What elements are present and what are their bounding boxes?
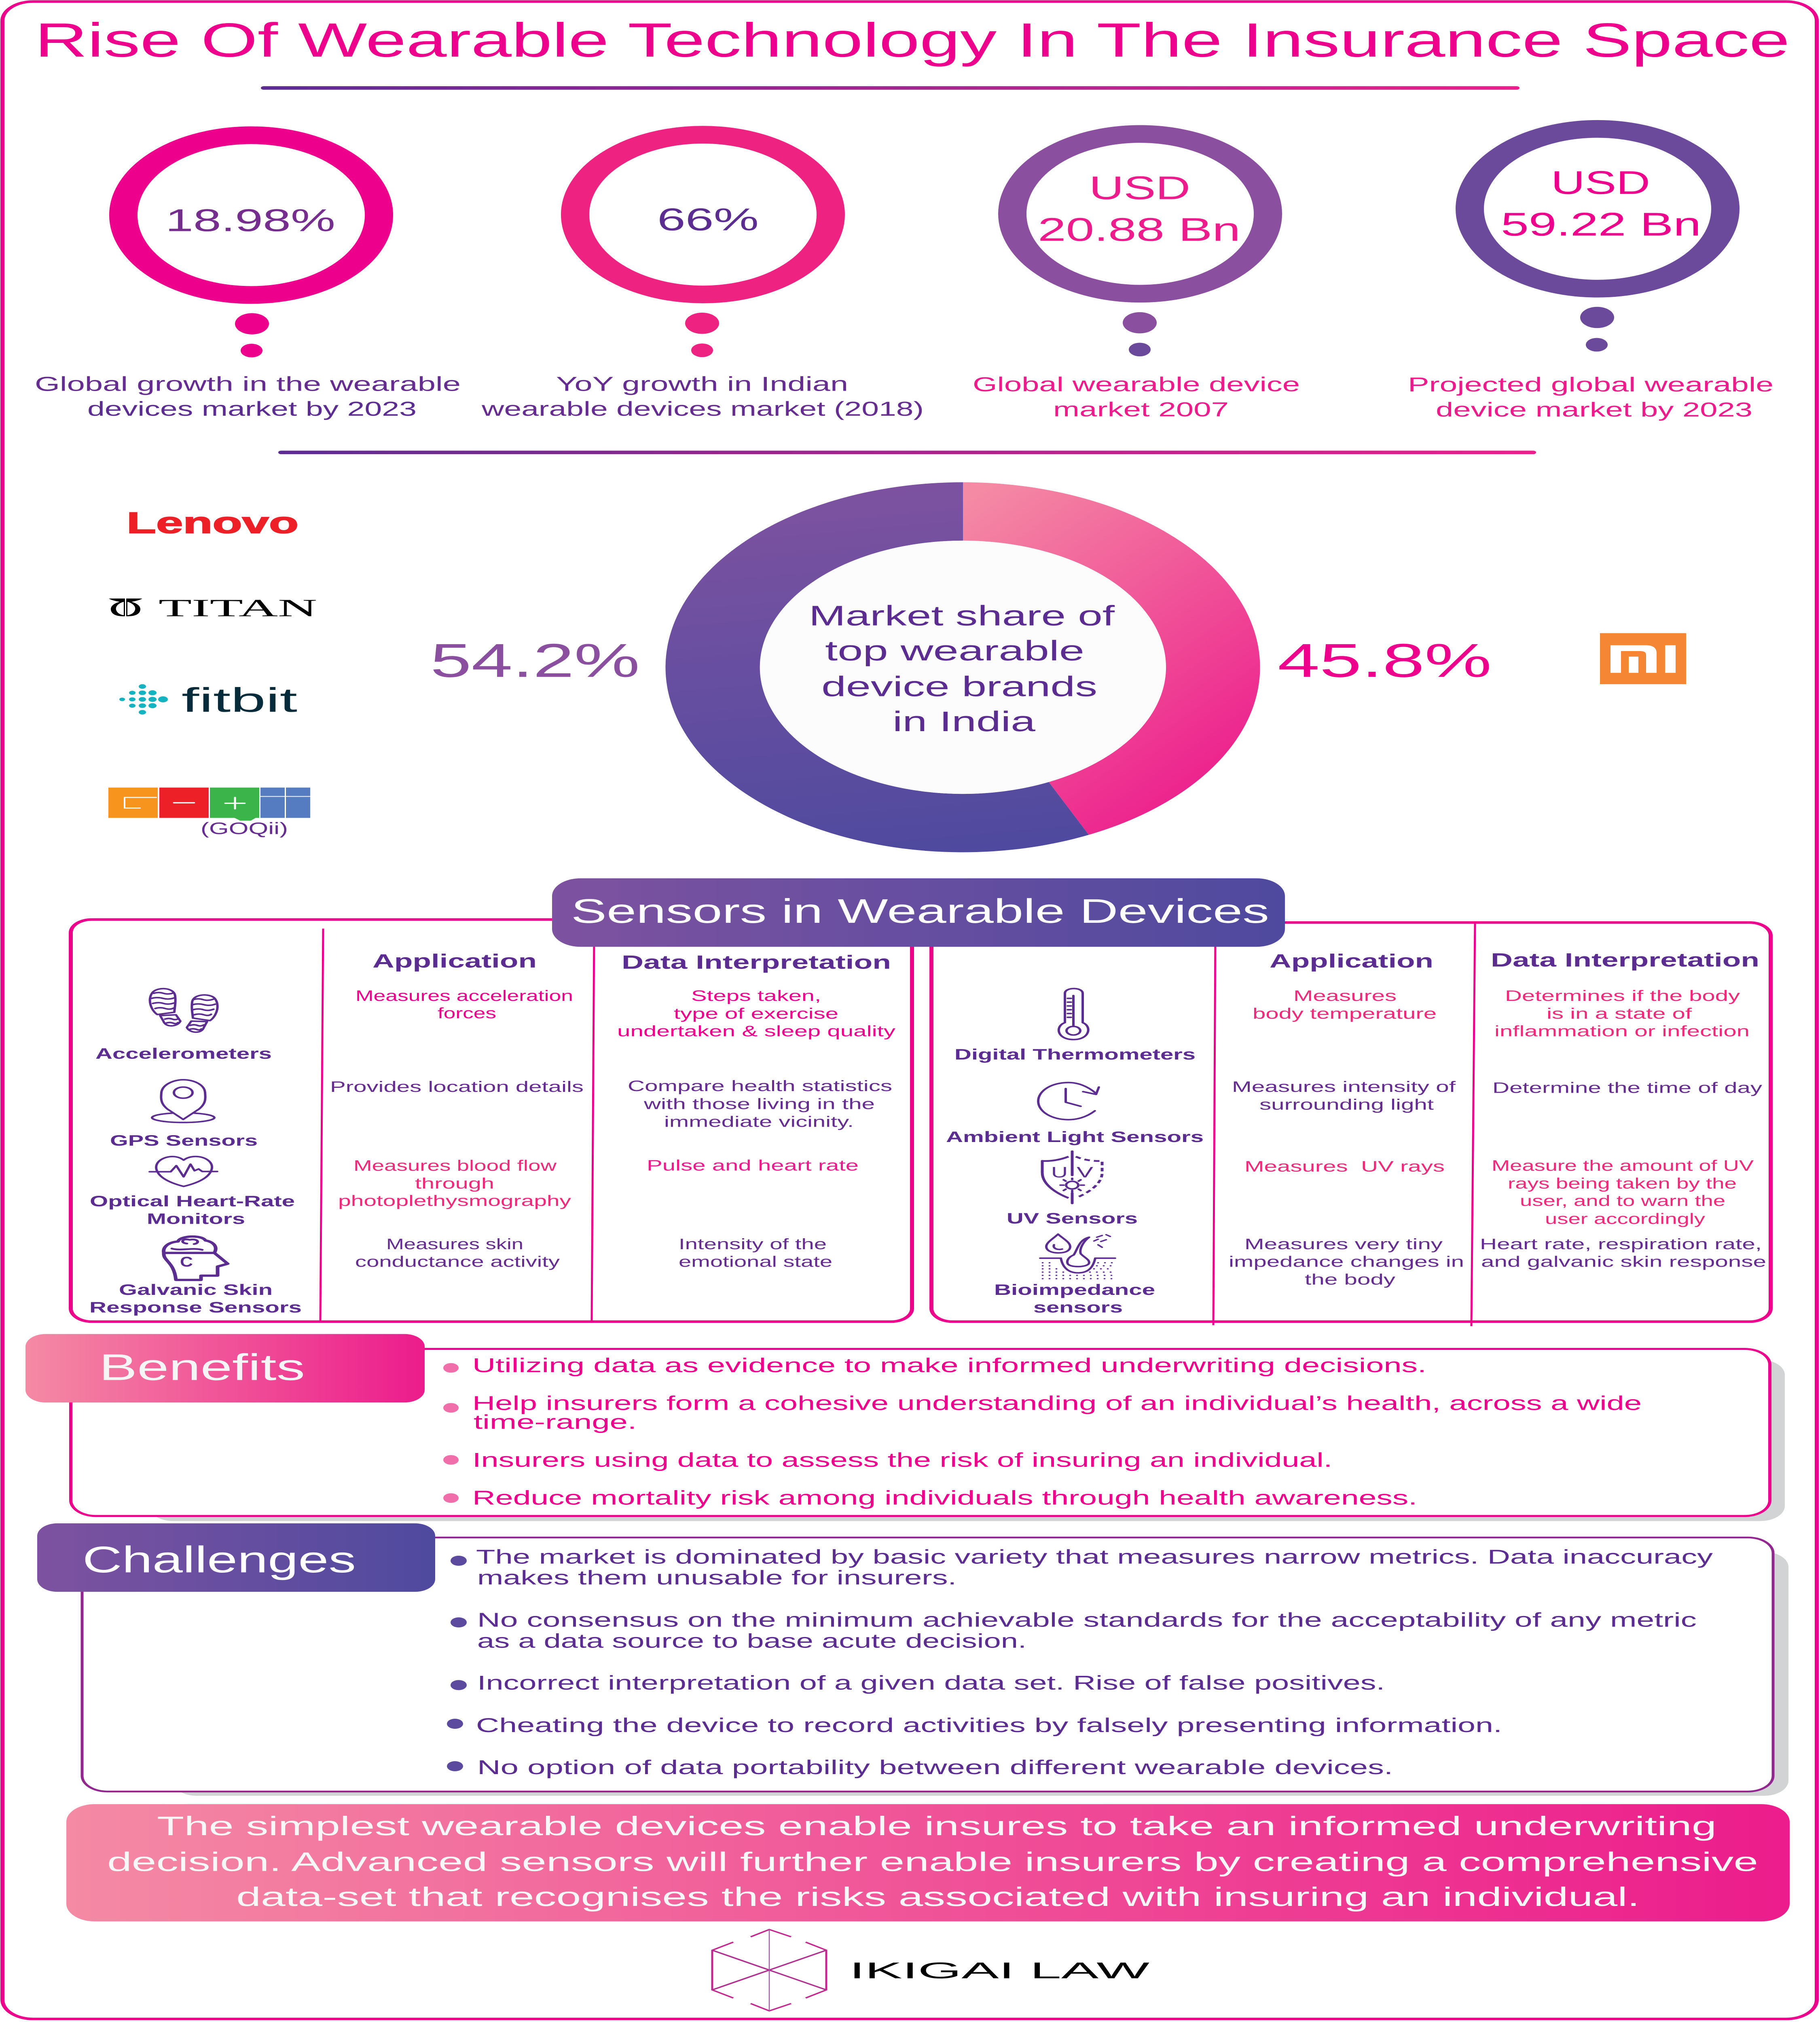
row 3 data interpretation: [1492, 1157, 1754, 1227]
row 2 data interpretation: Determine the time of day: [1492, 1079, 1762, 1096]
challenge 2: No consensus on the minimum achievable standards for the acceptability of any metric: [477, 1609, 1697, 1631]
label: galvanic skin response sensors: Galvanic Skin: [119, 1281, 273, 1298]
stat: Indian YoY growth 66%: [481, 135, 924, 420]
row 3 data interpretation: user, and to warn the: [1520, 1192, 1725, 1209]
benefit 4: Reduce mortality risk among individuals through health awareness.: [472, 1487, 1417, 1509]
row 2 data interpretation: Compare health statistics: [628, 1077, 892, 1094]
stat: Indian YoY growth 66%: wearable devices market (2018): [481, 398, 924, 420]
challenge 4: Cheating the device to record activities by falsely presenting information.: [476, 1714, 1502, 1736]
heading: application: Application: [1270, 950, 1433, 972]
row 4 application: conductance activity: [355, 1253, 560, 1270]
stat: USD 59.22 Bn: [1408, 129, 1773, 421]
label: bioimpedance sensors: [994, 1281, 1155, 1316]
donut centre label: device brands: [821, 670, 1097, 702]
label: bioimpedance sensors: Bioimpedance: [994, 1281, 1155, 1298]
icon: bioimpedance: [1040, 1234, 1115, 1279]
logo: Fitbit: fitbit: [182, 681, 297, 719]
stat: global growth 18.98%: [35, 135, 461, 420]
stat: USD 20.88 Bn: Global wearable device: [973, 373, 1300, 396]
benefit 2: time-range.: [474, 1411, 637, 1433]
row 4 application: Measures skin: [386, 1235, 523, 1252]
donut centre label: [809, 600, 1115, 737]
row 1 data interpretation: type of exercise: [674, 1005, 838, 1022]
row 4 data interpretation: [1480, 1235, 1766, 1270]
stat: USD 20.88 Bn: USD: [1089, 169, 1190, 206]
segment: 54.2% purple: [665, 482, 1089, 852]
logo: Lenovo: Lenovo: [127, 506, 298, 539]
benefit 3: Insurers using data to assess the risk of insuring an individual.: [472, 1449, 1332, 1471]
row 4 data interpretation: emotional state: [679, 1253, 832, 1270]
heading: sensors in wearable devices: Sensors in Wearable Devices: [571, 892, 1269, 930]
logo: GOQii: [108, 788, 310, 838]
icon: clock with arrow: [1038, 1083, 1099, 1120]
row 1 application: Measures acceleration: [356, 987, 573, 1004]
benefit 1: Utilizing data as evidence to make informed underwriting decisions.: [472, 1354, 1426, 1377]
icon: thermometer: [1059, 989, 1088, 1040]
logo: Ikigai Law: [712, 1929, 1149, 2011]
logo: GOQii: (GOQii): [201, 819, 288, 838]
icon: GPS pin: [152, 1080, 214, 1123]
row 4 application: [355, 1235, 560, 1270]
panel: sensors left table: [71, 920, 912, 1322]
row 3 application: Measures blood flow: [353, 1157, 557, 1174]
logo: Titan: TITAN: [159, 594, 317, 622]
heading: data interpretation: Data Interpretation: [622, 952, 891, 973]
callout: conclusion: decision. Advanced sensors will further enable insurers by creating a comprehensive: [107, 1847, 1758, 1877]
row 1 data interpretation: Steps taken,: [691, 987, 821, 1004]
row 1 data interpretation: undertaken & sleep quality: [617, 1023, 895, 1040]
row 4 data interpretation: [679, 1235, 832, 1270]
label: digital thermometers: Digital Thermometers: [954, 1046, 1196, 1063]
stat: Indian YoY growth 66%: 66%: [657, 202, 759, 237]
row 2 data interpretation: [628, 1077, 892, 1130]
callout: conclusion: The simplest wearable devices enable insures to take an informed underwriting: [157, 1811, 1716, 1841]
row 2 data interpretation: immediate vicinity.: [664, 1113, 854, 1130]
row 2 application: Provides location details: [330, 1078, 584, 1095]
stat: USD 20.88 Bn: 20.88 Bn: [1038, 211, 1240, 248]
row 1 application: forces: [438, 1005, 496, 1022]
row 3 application: photoplethysmography: [338, 1192, 571, 1209]
row 3 data interpretation: rays being taken by the: [1508, 1175, 1737, 1192]
challenge 1: The market is dominated by basic variety that measures narrow metrics. Data inaccuracy: [476, 1545, 1713, 1568]
row 3 data interpretation: Pulse and heart rate: [647, 1157, 859, 1174]
stat: global growth 18.98%: 18.98%: [165, 203, 335, 238]
challenge 2: as a data source to base acute decision.: [477, 1629, 1026, 1652]
label: bioimpedance sensors: sensors: [1033, 1299, 1123, 1316]
icon: head with brain: [164, 1237, 228, 1280]
label: galvanic skin response sensors: [89, 1281, 302, 1316]
heading: sensors in wearable devices: [552, 878, 1285, 947]
callout: conclusion: data-set that recognises the risks associated with insuring an individual.: [236, 1882, 1640, 1912]
donut centre label: in India: [893, 706, 1036, 737]
donut centre label: top wearable: [825, 635, 1084, 666]
row 1 data interpretation: [1494, 987, 1750, 1040]
row 4 data interpretation: Intensity of the: [679, 1235, 827, 1252]
stat: global growth 18.98%: devices market by 2023: [87, 398, 417, 420]
label: optical heart-rate monitors: Optical Heart-Rate: [90, 1193, 295, 1210]
logo: Mi: [1600, 633, 1686, 684]
tab: challenges: Challenges: [83, 1539, 356, 1580]
callout: conclusion: [66, 1804, 1790, 1921]
value: 45.8%: 45.8%: [1278, 634, 1492, 687]
row 1 application: [1253, 987, 1437, 1022]
row 4 data interpretation: and galvanic skin response: [1481, 1253, 1766, 1270]
label: galvanic skin response sensors: Response Sensors: [89, 1299, 302, 1316]
row 1 application: [356, 987, 573, 1022]
row 3 application: [338, 1157, 571, 1209]
row 3 application: through: [415, 1175, 494, 1192]
stat: USD 59.22 Bn: 59.22 Bn: [1501, 206, 1701, 243]
row 2 application: surrounding light: [1259, 1096, 1434, 1113]
label: optical heart-rate monitors: [90, 1193, 295, 1227]
heading: data interpretation: Data Interpretation: [1491, 950, 1759, 971]
stat: USD 20.88 Bn: market 2007: [1053, 398, 1229, 421]
logo: Titan: [109, 594, 317, 622]
row 4 data interpretation: Heart rate, respiration rate,: [1480, 1235, 1762, 1252]
panel: benefits: [25, 1334, 1785, 1521]
icon: UV shield: U: [1051, 1164, 1068, 1180]
logo: Fitbit: [119, 681, 297, 719]
row 4 application: impedance changes in: [1229, 1253, 1464, 1270]
row 3 data interpretation: Measure the amount of UV: [1492, 1157, 1754, 1174]
row 2 application: Measures intensity of: [1232, 1078, 1456, 1095]
challenge 1: makes them unusable for insurers.: [477, 1566, 957, 1589]
icon: UV shield: [1042, 1151, 1102, 1203]
donut chart: market share: [665, 482, 1260, 852]
row 2 data interpretation: with those living in the: [643, 1096, 875, 1113]
challenge 3: Incorrect interpretation of a given data set. Rise of false positives.: [477, 1671, 1385, 1694]
row 4 application: Measures very tiny: [1244, 1235, 1443, 1252]
tab: benefits: [25, 1334, 425, 1402]
icon: UV shield: V: [1077, 1164, 1093, 1180]
tab: benefits: Benefits: [99, 1347, 305, 1388]
stat: USD 20.88 Bn: [973, 134, 1300, 421]
stat: USD 59.22 Bn: Projected global wearable: [1408, 373, 1773, 396]
segment: 45.8% pink: [963, 482, 1260, 835]
logo: Ikigai Law: IKIGAI LAW: [849, 1958, 1149, 1983]
value: 54.2%: 54.2%: [430, 634, 640, 687]
row 1 data interpretation: is in a state of: [1547, 1005, 1692, 1022]
label: UV sensors: UV Sensors: [1007, 1210, 1138, 1227]
row 2 application: [1232, 1078, 1456, 1113]
benefit 2: [443, 1392, 1642, 1433]
row 1 application: body temperature: [1253, 1005, 1437, 1022]
benefit 2: Help insurers form a cohesive understanding of an individual’s health, across a wide: [472, 1392, 1642, 1414]
row 4 application: the body: [1305, 1271, 1395, 1288]
heading: application: Application: [372, 950, 537, 972]
icon: heart rate: [150, 1157, 217, 1187]
row 1 data interpretation: [617, 987, 895, 1040]
icon: footprints: [150, 989, 218, 1032]
label: optical heart-rate monitors: Monitors: [147, 1210, 245, 1227]
row 1 data interpretation: inflammation or infection: [1494, 1023, 1750, 1040]
row 4 application: [1229, 1235, 1464, 1288]
challenge 2: [451, 1609, 1697, 1652]
icon: head with brain: C: [180, 1254, 193, 1269]
tab: challenges: [37, 1523, 435, 1592]
stat: Indian YoY growth 66%: YoY growth in Indian: [556, 372, 848, 395]
stat: global growth 18.98%: Global growth in the wearable: [35, 372, 461, 395]
row 3 application: Measures UV rays: [1244, 1158, 1445, 1175]
row 1 application: Measures: [1293, 987, 1397, 1004]
challenge 1: [451, 1545, 1713, 1589]
label: ambient light sensors: Ambient Light Sensors: [946, 1128, 1204, 1145]
row 3 data interpretation: user accordingly: [1545, 1210, 1705, 1227]
stat: USD 59.22 Bn: USD: [1551, 164, 1650, 201]
row 1 data interpretation: Determines if the body: [1505, 987, 1740, 1004]
label: accelerometers: Accelerometers: [95, 1045, 272, 1062]
donut centre label: Market share of: [809, 600, 1115, 631]
panel: challenges: [37, 1523, 1788, 1796]
challenge 5: No option of data portability between different wearable devices.: [477, 1756, 1393, 1779]
stat: USD 59.22 Bn: device market by 2023: [1436, 398, 1752, 421]
panel: sensors right table: [931, 922, 1771, 1326]
label: GPS sensors: GPS Sensors: [110, 1132, 258, 1149]
